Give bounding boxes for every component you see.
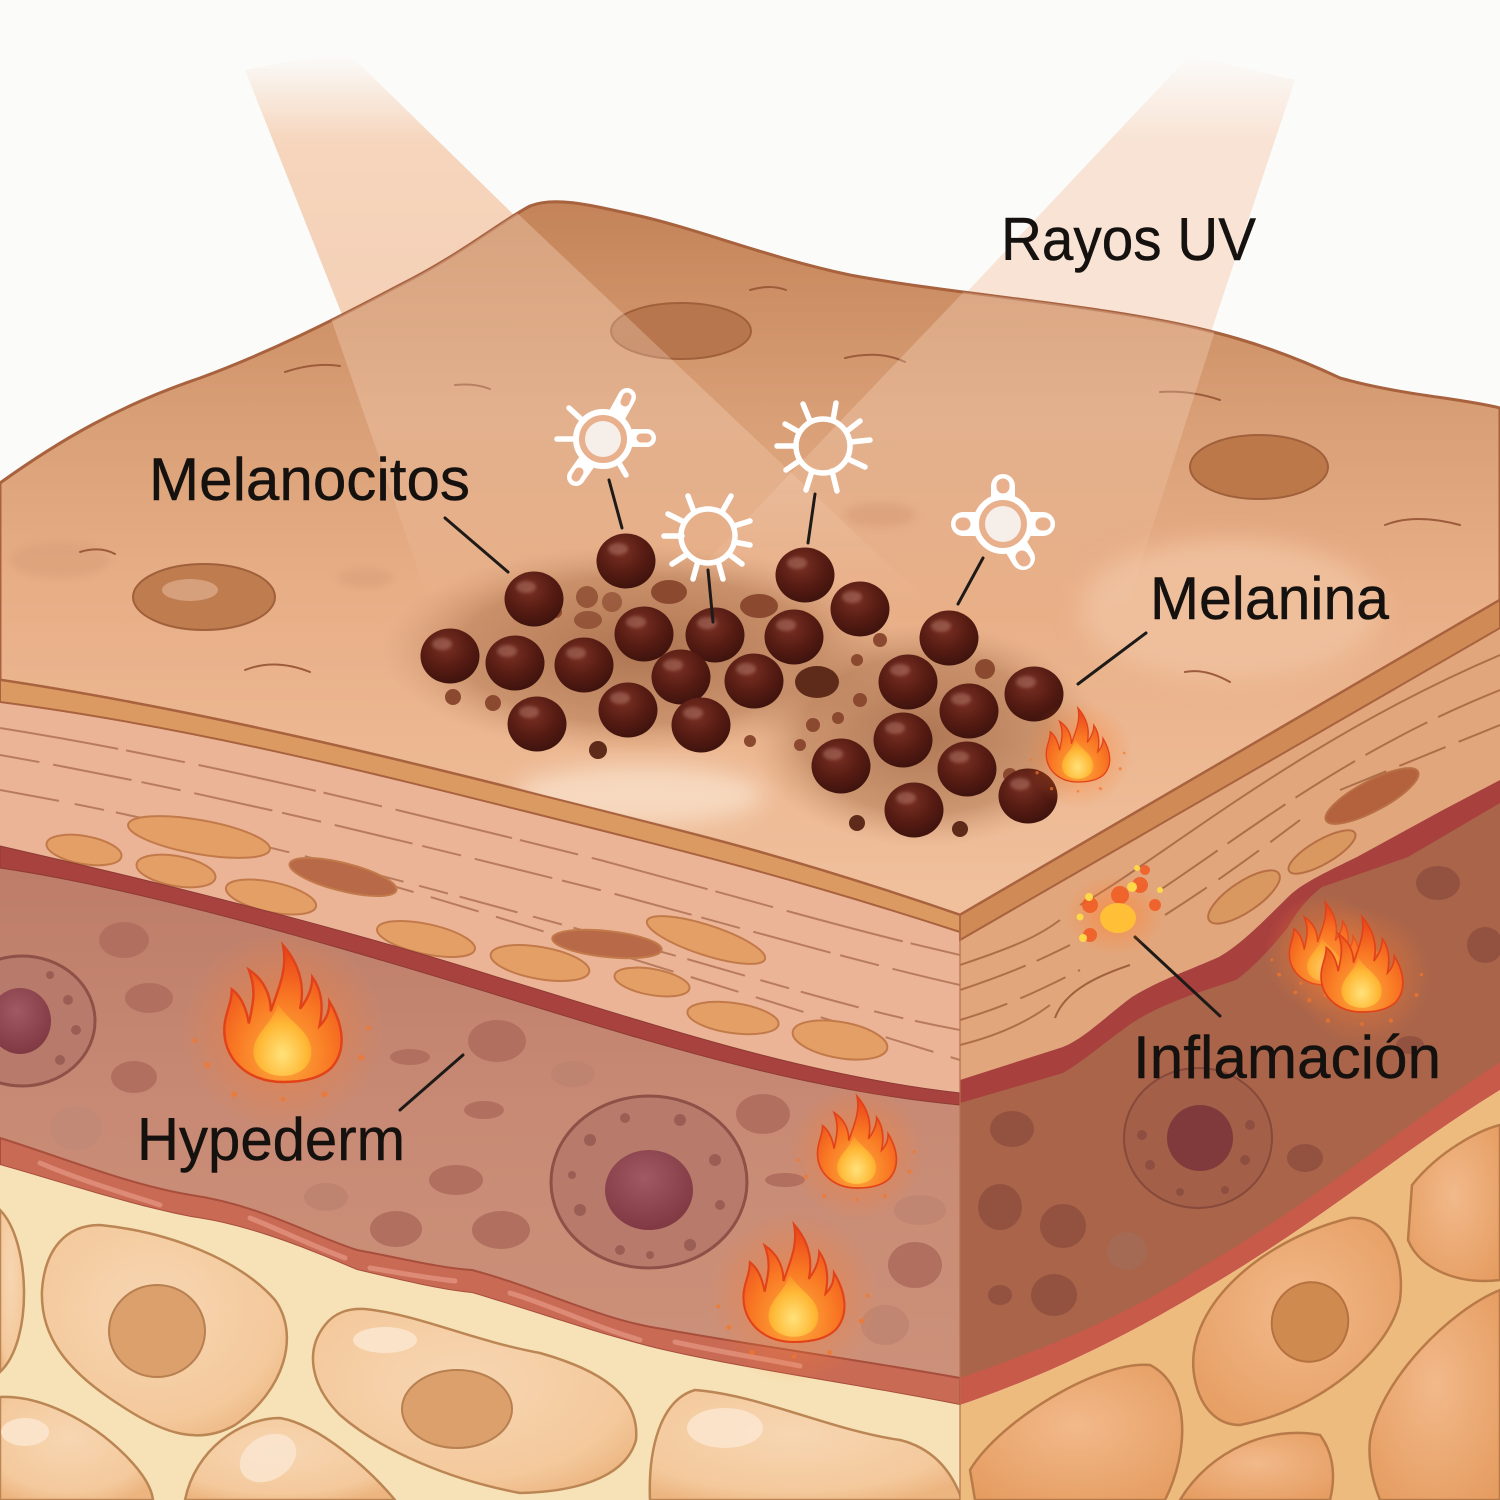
icon: inflammation burst	[1065, 865, 1165, 955]
dermis cells	[50, 922, 946, 1345]
melanocitos: dark cells	[420, 534, 1064, 838]
icon: melanocyte activated by UV 2	[664, 496, 750, 579]
epidermis cells	[44, 808, 890, 1066]
melanin patch	[382, 545, 1100, 847]
dermis lower vessel	[0, 1138, 960, 1405]
panel: right face epidermis	[960, 600, 1500, 1082]
panel: skin surface	[0, 202, 1500, 915]
connector lines	[400, 480, 1220, 1110]
panel: left face dermis	[0, 846, 960, 1405]
surface moles	[133, 303, 1328, 630]
icons: flames	[183, 700, 1432, 1384]
right dermis cells	[978, 866, 1500, 1316]
beam: left UV ray over sky	[245, 50, 560, 360]
panel: left face epidermis	[0, 680, 960, 1095]
label: Melanocitos: Melanocitos	[149, 446, 470, 513]
icon: melanocyte activated by UV 3	[777, 403, 870, 491]
panel: fat layer right	[960, 1090, 1500, 1500]
cut-off dermis cell	[0, 956, 95, 1086]
beam: UV light on skin	[332, 214, 1214, 570]
panel: corner edge	[959, 915, 961, 1500]
label: Rayos UV: Rayos UV	[1001, 206, 1256, 273]
icon: melanocyte activated by UV 1	[557, 397, 647, 477]
surface wrinkles	[80, 287, 1460, 682]
panel: right face dermis	[960, 780, 1500, 1405]
melanin granules	[445, 580, 1017, 837]
epidermis fibres	[0, 728, 960, 1060]
right large dermis cell	[1124, 1068, 1272, 1208]
icon: melanocyte activated by UV 4	[962, 485, 1044, 560]
beam: right UV ray over sky	[950, 55, 1295, 350]
label: Melanina: Melanina	[1150, 565, 1390, 632]
label: Inflamación: Inflamación	[1133, 1024, 1441, 1091]
large dermis cell	[551, 1096, 747, 1268]
surface highlight patches	[10, 503, 1380, 825]
panel: fat layer left	[0, 1165, 962, 1500]
label: Hypederm: Hypederm	[137, 1106, 405, 1173]
